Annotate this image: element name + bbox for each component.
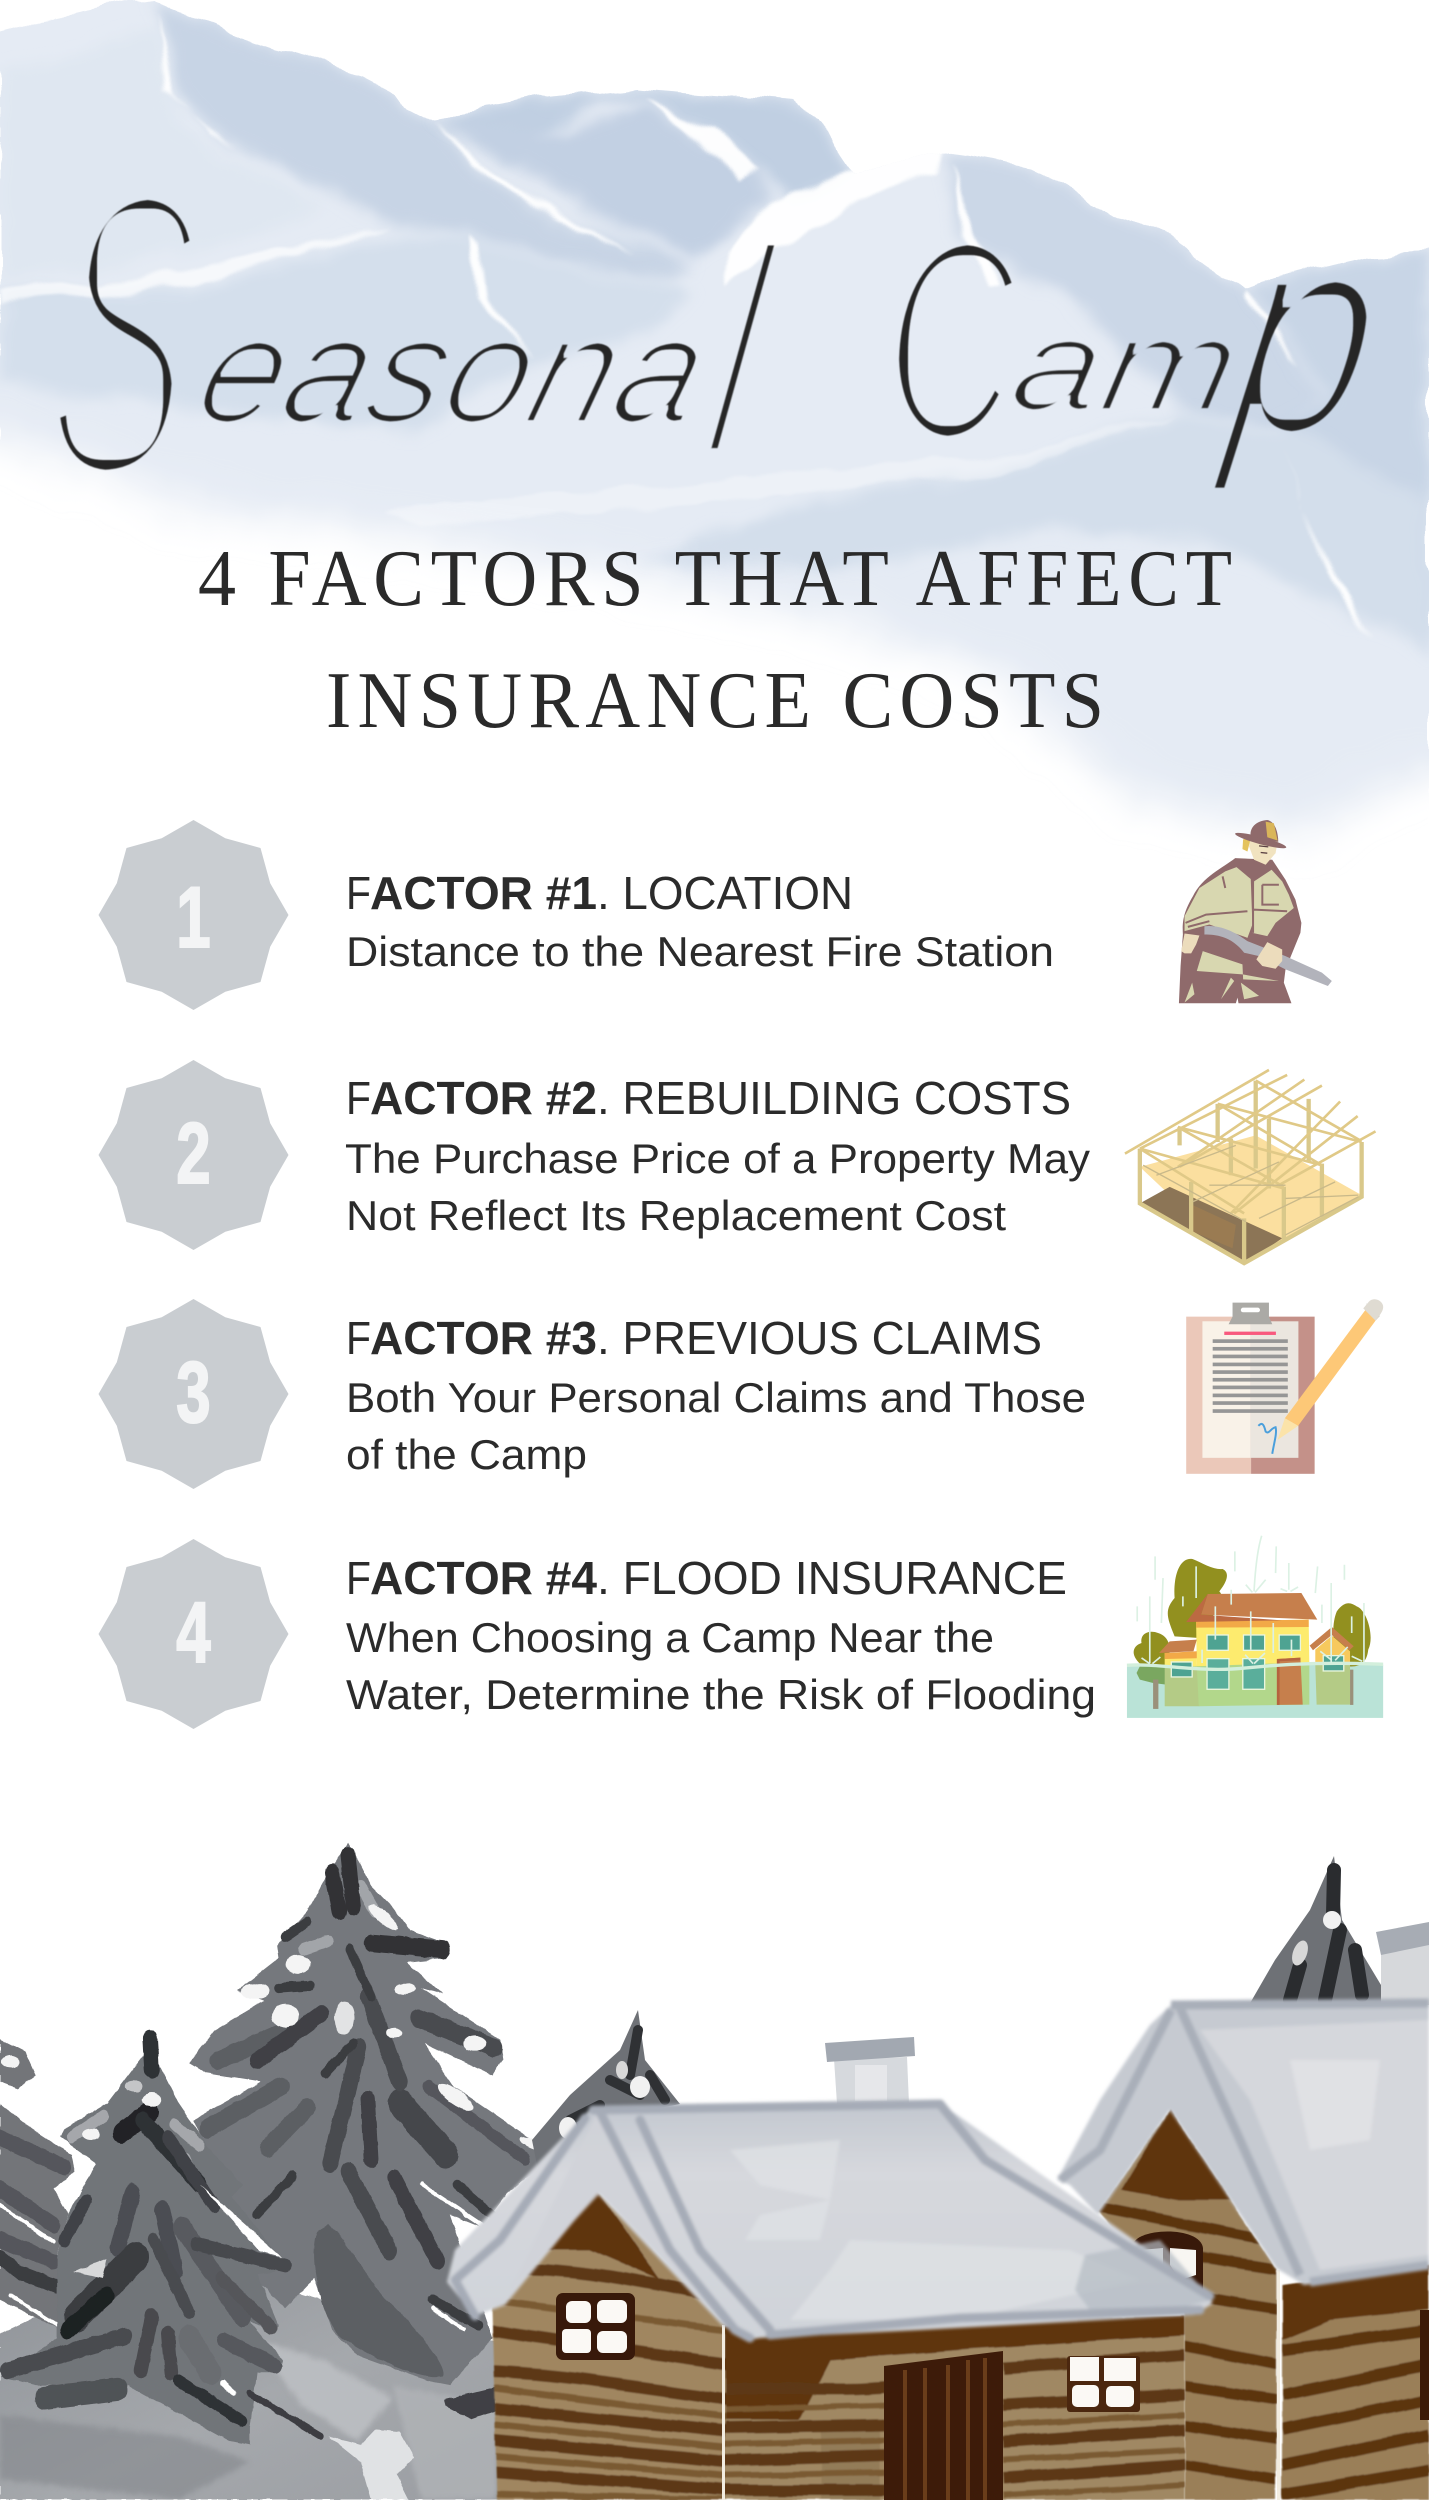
factor 3 row [98,1299,1383,1489]
back cabin window [1133,2232,1203,2290]
factor 2 text: ACTOR #2 [370,1072,597,1124]
title: Seasonal Camp: am [1001,292,1251,438]
factor 3 text: of the Camp [346,1431,587,1478]
title: Seasonal Camp: l [694,192,788,511]
factor 4 row [98,1536,1383,1729]
badge 2 [98,1060,288,1250]
watercolor mountains background [0,0,1429,835]
factor 2 row [98,1060,1376,1265]
door [884,2351,1003,2500]
badge 1: 1 [176,869,211,965]
badge 2: 2 [176,1105,211,1201]
chimney far right [1376,1922,1429,2005]
back cabin [1057,2001,1429,2500]
back cabin roof [1057,2001,1429,2285]
title: Seasonal Camp [36,107,1401,564]
badge 4 [98,1539,288,1729]
title: Seasonal Camp: S [36,107,210,564]
back cabin walls [1090,2100,1429,2500]
factor 2 text: Not Reflect Its Replacement Cost [346,1192,1006,1239]
factor 1 text [346,867,1054,975]
factor 4 text: ACTOR #4 [370,1552,597,1604]
factor 3 text: ACTOR #3 [370,1312,597,1364]
factor 1 text: F [346,867,371,919]
icon: flooded house [1127,1536,1383,1718]
factor 4 text: Water, Determine the Risk of Flooding [346,1671,1096,1718]
factor 4 text [346,1552,1096,1718]
window right [1067,2356,1140,2412]
factor 1 text: . LOCATION [597,867,853,919]
badge 3 [98,1299,288,1489]
badge 1 [98,820,288,1010]
factor 3 text: F [346,1312,371,1364]
winter landscape scene [0,1843,1429,2500]
front cabin [447,2037,1212,2500]
factor 3 text: . PREVIOUS CLAIMS [597,1312,1042,1364]
snowy ground [0,2257,500,2500]
chimney [825,2037,915,2104]
subtitle: 4 factors that affect insurance costs: INSURANCE COSTS [326,655,1104,744]
factor 4 text: . FLOOD INSURANCE [597,1552,1067,1604]
factor 2 text: . REBUILDING COSTS [597,1072,1071,1124]
subtitle: 4 factors that affect insurance costs [198,533,1232,744]
icon: firefighter [1179,820,1332,1003]
title: Seasonal Camp: C [885,181,1018,500]
left edge pine tree [0,2039,75,2330]
factor 4 text: F [346,1552,371,1604]
badge 4: 4 [176,1584,211,1680]
far right pine tree [1249,1856,1384,2005]
factor 2 text: The Purchase Price of a Property May [345,1135,1090,1182]
highlights [0,23,1366,632]
factor 2 text: F [346,1072,371,1124]
factor 2 text [345,1072,1090,1239]
trees and snowy ground [0,1843,546,2500]
badge 3: 3 [176,1344,211,1440]
roof [447,2101,1212,2340]
walls [490,2190,1185,2500]
factor 3 text [346,1312,1086,1478]
title: Seasonal Camp: easona [181,287,726,454]
small back pine tree [532,2010,680,2180]
icon: clipboard and pencil [1186,1299,1383,1474]
window left [556,2293,635,2360]
large pine tree [189,1843,546,2385]
factor 1 text: ACTOR #1 [370,867,597,919]
factor 1 text: Distance to the Nearest Fire Station [346,928,1054,975]
subtitle: 4 factors that affect insurance costs: 4 FACTORS THAT AFFECT [198,533,1232,622]
factor 3 text: Both Your Personal Claims and Those [346,1374,1086,1421]
title: Seasonal Camp: p [1205,174,1401,494]
factor 1 row [98,820,1332,1010]
front left pine tree [0,2033,321,2445]
icon: house frame under construction [1125,1070,1376,1265]
factor 4 text: When Choosing a Camp Near the [346,1614,994,1661]
